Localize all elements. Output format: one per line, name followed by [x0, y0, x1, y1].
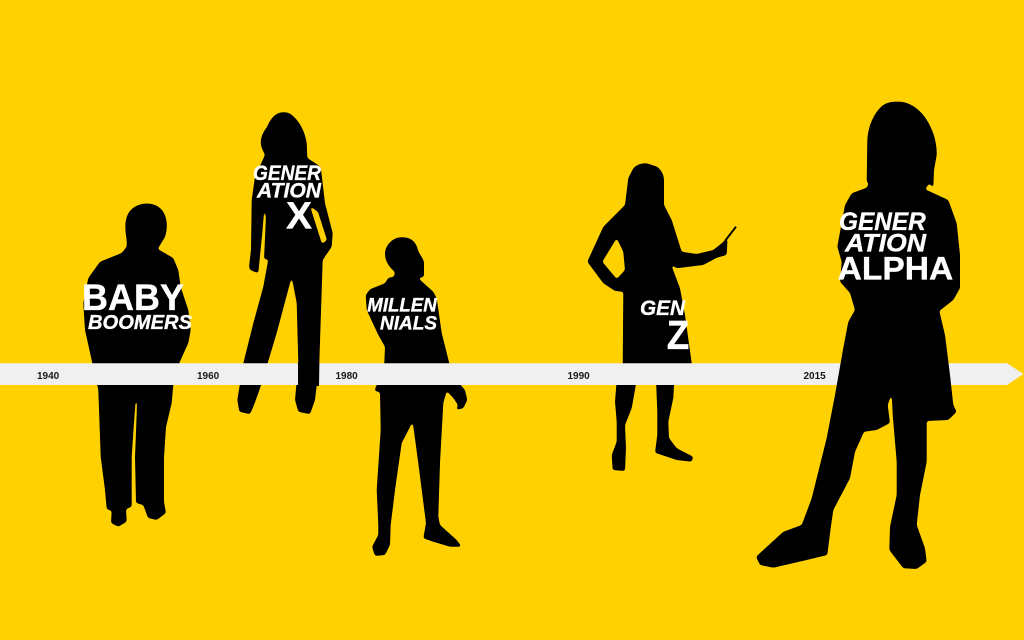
label: Generation X: ATION: [256, 180, 322, 203]
figure: Generation X: [237, 112, 333, 414]
label: Gen Z: Z: [667, 312, 689, 358]
figure: Gen Z right leg: [655, 380, 693, 462]
label: Millennials: [367, 296, 438, 334]
label: Millennials: MILLEN: [367, 296, 438, 317]
year: 1990: 1990: [568, 371, 590, 382]
icon: pointer in hand: [725, 227, 736, 241]
label: Generation Alpha: GENER: [839, 208, 926, 236]
label: Generation X: X: [286, 196, 313, 238]
label: Generation X: GENER: [253, 162, 322, 185]
figure: Millennials: [366, 237, 467, 556]
label: Baby Boomers: BOOMERS: [88, 312, 193, 334]
label: Generation Alpha: [838, 208, 953, 286]
label: Gen Z: [640, 297, 689, 358]
figure: Gen Z: [587, 163, 736, 471]
year: 1980: 1980: [336, 371, 358, 382]
year: 1940: 1940: [37, 371, 60, 382]
label: Millennials: NIALS: [380, 314, 437, 334]
timeline arrow: [0, 363, 1024, 385]
label: Generation Alpha: ALPHA: [838, 250, 953, 286]
figure: Gen Z left leg: [612, 380, 637, 471]
label: Gen Z: GEN: [640, 297, 686, 320]
label: Generation X: [253, 162, 322, 238]
figure: Generation X front leg: [298, 362, 319, 386]
label: Baby Boomers: BABY: [82, 277, 184, 318]
figure: Generation Alpha: [756, 102, 960, 569]
label: Generation Alpha: ATION: [844, 230, 927, 258]
year: 2015: 2015: [804, 371, 826, 382]
label: Baby Boomers: [82, 277, 193, 334]
figure: Baby Boomers: [82, 204, 193, 527]
year: 1960: 1960: [197, 371, 220, 382]
